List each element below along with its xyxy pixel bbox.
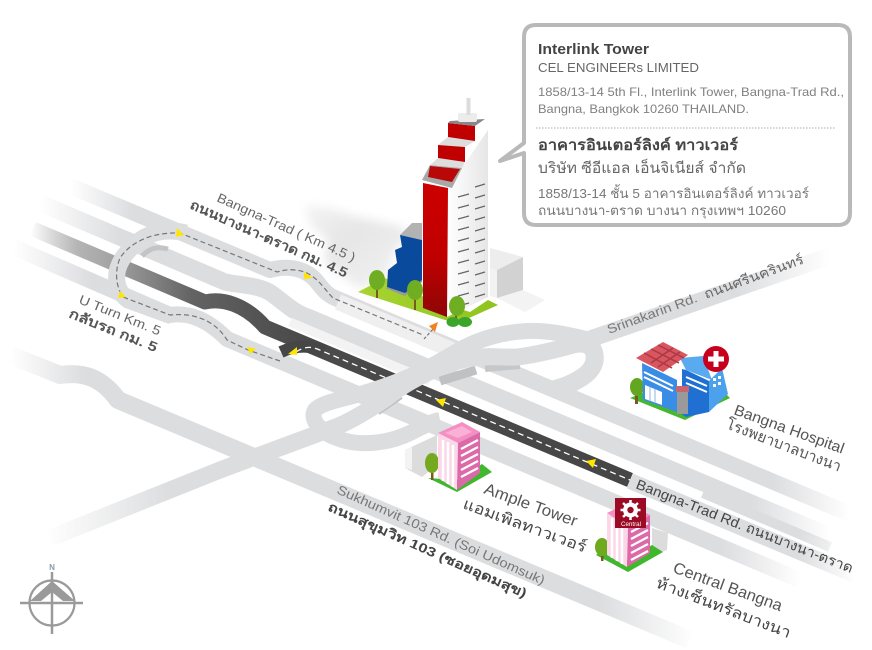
label: Srinakarin: Srinakarin Rd. — [605, 290, 699, 337]
bushes — [446, 317, 472, 327]
light strip above main road — [290, 322, 430, 381]
left face — [607, 513, 628, 567]
interchange shadow: right — [485, 365, 520, 368]
lawn — [428, 464, 492, 492]
interchange upper arc and left loop — [314, 331, 590, 443]
label: U Turn: U Turn Km. 5 — [77, 292, 163, 338]
red step upper — [448, 123, 475, 141]
label: Srinakarin Thai: ถนนศรีนครินทร์ — [702, 251, 806, 302]
rear annex — [405, 435, 437, 477]
label: Sukhumvit Thai: ถนนสุขุมวิท 103 (ซอยอุดมสุข) — [325, 499, 529, 602]
rear annex — [652, 528, 668, 556]
tree — [425, 453, 439, 480]
centre line of main road — [296, 347, 630, 480]
label: Bangna-Trad Km 4.5: Bangna-Trad ( Km 4.5 ) — [215, 190, 358, 265]
left wing — [642, 363, 677, 412]
English company: CEL ENGINEERs LIMITED — [538, 61, 699, 75]
arrow: U-turn bottom — [118, 291, 126, 298]
tree right — [449, 296, 465, 320]
striped white window — [645, 385, 662, 405]
tree left — [369, 270, 385, 298]
slats — [631, 523, 648, 560]
tree — [630, 378, 644, 404]
tree — [595, 538, 609, 561]
compass ring — [30, 580, 74, 626]
interchange right loop — [552, 343, 595, 390]
route to Interlink Tower: dashed path — [117, 233, 423, 361]
right face — [627, 515, 650, 567]
compass N: N — [49, 563, 55, 572]
Thai address line 2: ถนนบางนา-ตราด บางนา กรุงเทพฯ 10260 — [538, 203, 786, 219]
right face — [457, 432, 480, 490]
window slats — [458, 184, 485, 306]
building: Central Bangna — [595, 498, 668, 572]
label: Sukhumvit: Sukhumvit 103 Rd. (Soi Udomsuk) — [335, 482, 547, 588]
red tiled roof — [636, 342, 688, 372]
main dark road Bangna-Trad — [33, 229, 630, 480]
side windows — [713, 376, 721, 387]
white bands — [644, 372, 707, 392]
arrow: stub — [288, 347, 297, 355]
label: Bangna-Trad Km 4.5 Thai: ถนนบางนา-ตราด กม. 4.5 — [188, 197, 351, 281]
road: upper Bangna-Trad frontage — [70, 186, 850, 514]
red step lower — [428, 166, 460, 182]
building: Ample Tower — [405, 422, 492, 492]
right block roof — [680, 356, 712, 380]
Thai address line 1: 1858/13-14 ชั้น 5 อาคารอินเตอร์ลิงค์ ทาวเวอร์ — [538, 184, 809, 201]
icon: north compass — [20, 563, 83, 634]
icon: red cross badge — [703, 346, 729, 372]
red step middle — [438, 145, 465, 162]
Thai name: อาคารอินเตอร์ลิงค์ ทาวเวอร์ — [538, 136, 739, 154]
interchange shadow: centre — [440, 370, 476, 381]
label: U Turn Thai: กลับรถ กม. 5 — [67, 306, 160, 355]
Thai company: บริษัท ซีอีแอล เอ็นจิเนียส์ จำกัด — [538, 158, 746, 177]
parapet — [422, 165, 462, 188]
interchange shadow: lower left — [377, 395, 400, 411]
label: Bangna Hospital Thai: โรงพยาบาลบางนา — [724, 415, 844, 475]
road: Srinakarin — [50, 256, 830, 538]
callout frame — [500, 25, 850, 225]
label: Bangna-Trad Rd: Bangna-Trad Rd. ถนนบางนา-ตราด — [634, 476, 856, 576]
hospital lawn — [630, 390, 730, 420]
left face — [438, 433, 458, 490]
right block side — [709, 368, 728, 412]
spire — [466, 98, 470, 115]
road: Sukhumvit 103 — [10, 355, 690, 640]
compass arrowhead — [30, 581, 75, 601]
light service lane beside tower — [338, 302, 452, 350]
rear grey annex — [490, 248, 545, 312]
callout box: company address — [500, 25, 850, 225]
upper ledge — [438, 137, 475, 147]
top ledge — [448, 119, 485, 126]
white centre strip — [677, 368, 682, 388]
English address line 2: Bangna, Bangkok 10260 THAILAND. — [538, 102, 749, 116]
lawn — [596, 545, 663, 572]
arrow: U-turn top — [176, 228, 184, 237]
dark road exit stub — [281, 347, 324, 352]
arrow: lower lane — [247, 347, 256, 354]
road network — [10, 186, 855, 640]
label: Ample Tower Thai: แอมเพิลทาวเวอร์ — [461, 495, 589, 556]
arrow: upper lane — [304, 272, 313, 279]
roof box — [458, 113, 477, 122]
route connector to tower — [424, 328, 434, 339]
blue annex — [385, 223, 422, 296]
tree middle — [407, 280, 423, 310]
Central logo: Central — [621, 522, 641, 528]
building: Interlink Tower — [358, 98, 545, 327]
label: Central Bangna Thai: ห้างเซ็นทรัลบางนา — [654, 573, 794, 642]
road: lower frontage — [13, 247, 800, 580]
divider — [536, 127, 836, 129]
red front face — [423, 183, 448, 317]
tower shadow on ground — [305, 205, 410, 288]
English address line 1: 1858/13-14 5th Fl., Interlink Tower, Bangna-Trad Rd., — [538, 85, 844, 99]
building: Bangna Hospital — [630, 342, 730, 420]
gate pillar — [676, 386, 689, 414]
label: Bangna Hospital: Bangna Hospital — [732, 402, 846, 457]
icon: orange arrow — [429, 322, 438, 332]
label: Ample Tower: Ample Tower — [482, 481, 580, 531]
U-turn underpass shade — [142, 248, 168, 256]
roof — [438, 422, 480, 443]
slats — [461, 440, 478, 477]
grey fill between frontages at the far right — [703, 493, 830, 547]
road: U-turn loop — [117, 231, 186, 316]
road: extension of Bangna-Trad — [630, 481, 855, 575]
roof — [607, 503, 650, 527]
arrow: main road east — [586, 459, 596, 468]
label: Central Bangna: Central Bangna — [671, 560, 785, 615]
arrow: main road west — [436, 398, 446, 407]
compass cross — [20, 572, 83, 634]
green lawn — [358, 278, 498, 323]
road: second frontage — [40, 203, 830, 536]
yellow direction arrows — [118, 228, 596, 468]
English name: Interlink Tower — [538, 41, 649, 58]
right block front — [678, 368, 709, 417]
white side with windows — [447, 130, 488, 317]
middle ledge — [430, 158, 465, 168]
